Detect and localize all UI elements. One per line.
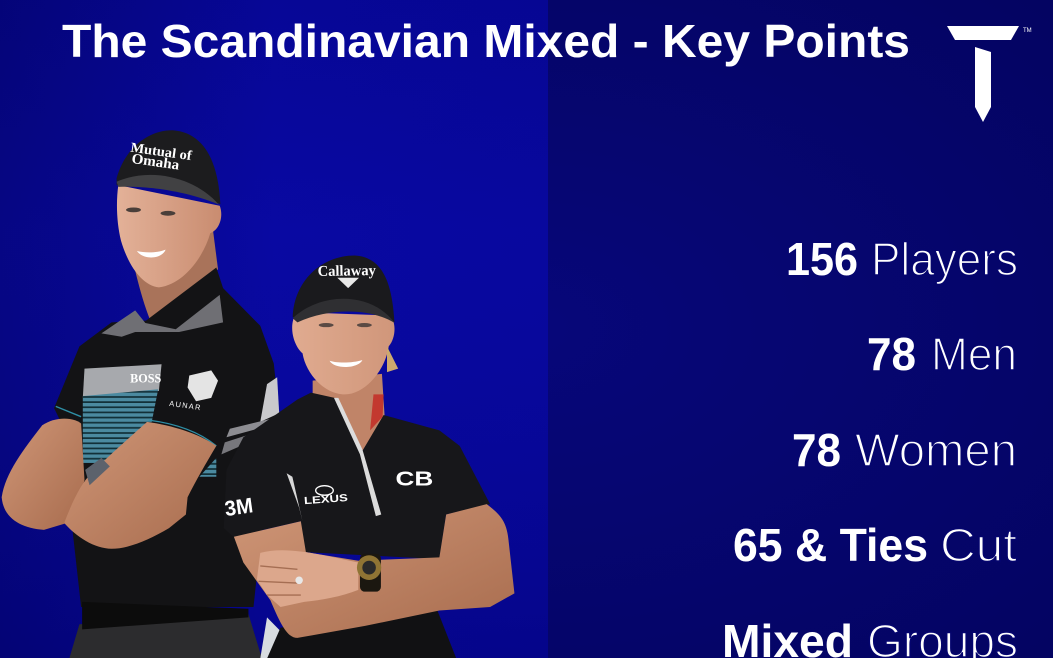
title: The Scandinavian Mixed - Key Points bbox=[62, 15, 910, 67]
stat: 156 players: Players bbox=[871, 233, 1018, 285]
woman trouser stripe bbox=[260, 617, 281, 658]
man sleeve trim bbox=[56, 406, 216, 446]
man back forearm bbox=[2, 419, 84, 530]
man front forearm bbox=[64, 422, 216, 549]
man trousers bbox=[69, 614, 262, 658]
woman cap: Callaway bbox=[318, 263, 376, 280]
man belt bbox=[82, 602, 248, 629]
woman smile bbox=[330, 360, 362, 367]
woman eyes bbox=[319, 323, 372, 327]
man smile bbox=[137, 250, 166, 257]
stat: mixed groups bbox=[722, 615, 1018, 658]
woman hand bbox=[257, 550, 358, 607]
man shirt chest graphic: BOSS bbox=[130, 371, 161, 385]
key points list bbox=[722, 233, 1018, 658]
stat: 78 men bbox=[867, 328, 1017, 380]
man face bbox=[117, 185, 221, 287]
woman zip bbox=[334, 398, 381, 516]
man eyes bbox=[126, 207, 175, 216]
woman shirt logos: 3M bbox=[223, 494, 255, 521]
stat: 78 men: Men bbox=[931, 328, 1017, 380]
woman shirt logos bbox=[223, 468, 433, 521]
woman finger lines bbox=[259, 566, 301, 595]
stat: 78 women: 78 bbox=[792, 424, 841, 476]
man neck bbox=[135, 230, 218, 321]
man sleeve badge bbox=[169, 370, 218, 412]
man collar stripes bbox=[101, 295, 223, 337]
man bbox=[2, 130, 279, 658]
stat: 156 players: 156 bbox=[786, 233, 858, 285]
background: left panel bbox=[0, 0, 548, 658]
man shirt chest graphic bbox=[83, 364, 216, 477]
stat: 156 players bbox=[786, 233, 1018, 285]
stat: 65 and ties cut: 65 & Ties bbox=[733, 519, 928, 571]
man sleeve stripes bbox=[221, 377, 279, 454]
man watch bbox=[85, 458, 110, 485]
golfers photo illustration bbox=[2, 130, 514, 658]
woman hair bbox=[387, 346, 398, 372]
woman sleeve trim bbox=[287, 473, 303, 521]
stat: 78 men: 78 bbox=[867, 328, 916, 380]
woman lower shirt bbox=[267, 607, 456, 658]
icon: tee logo bbox=[947, 26, 1032, 122]
woman bbox=[223, 255, 514, 658]
woman shirt logos: LEXUS bbox=[304, 493, 348, 507]
woman cap bbox=[293, 255, 395, 323]
woman red collar bbox=[370, 394, 384, 430]
stat: 78 women: Women bbox=[855, 424, 1017, 476]
icon: tee logo: TM bbox=[1023, 28, 1032, 34]
man cap: Omaha bbox=[131, 151, 180, 174]
woman ring bbox=[295, 577, 303, 584]
man cap: Mutual of bbox=[130, 140, 193, 163]
stat: 65 and ties cut: Cut bbox=[940, 519, 1017, 571]
woman watch bbox=[357, 554, 381, 592]
woman face bbox=[292, 312, 395, 394]
woman arms bbox=[234, 504, 514, 638]
woman shirt bbox=[224, 393, 490, 559]
man shirt bbox=[54, 267, 279, 607]
woman shirt logos: CB bbox=[395, 468, 433, 490]
man sleeve badge: AUNAR bbox=[169, 399, 202, 412]
man cap bbox=[117, 130, 220, 205]
woman neck bbox=[313, 374, 385, 451]
